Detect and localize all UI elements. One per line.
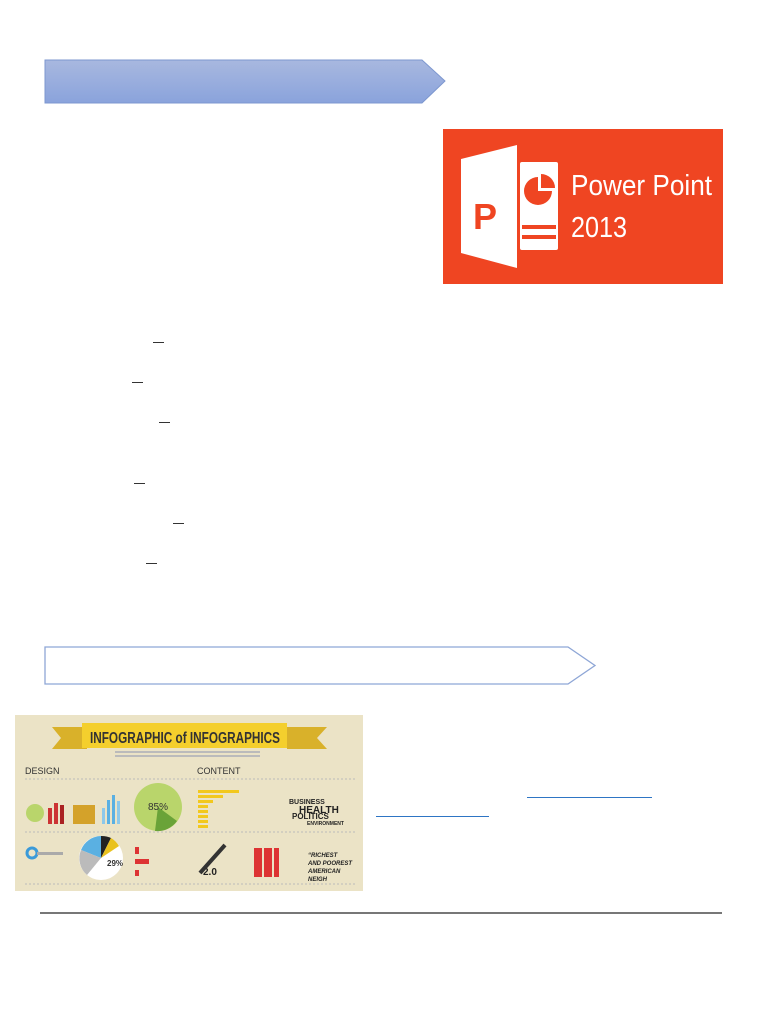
infographic image: ENVIRONMENT (307, 821, 344, 827)
bottom rule (40, 912, 722, 914)
infographic image: POLITICS (292, 812, 330, 821)
powerpoint logo (443, 129, 723, 284)
powerpoint logo: P (473, 196, 497, 237)
header arrow 1 (44, 60, 446, 104)
infographic image: NEIGH (308, 877, 328, 883)
infographic image: 29% (107, 859, 123, 868)
infographic image: CONTENT (197, 766, 241, 776)
infographic image: 85% (148, 802, 168, 813)
list dashes (132, 342, 184, 564)
infographic image: DESIGN (25, 766, 60, 776)
link underline 1 (527, 797, 652, 798)
banner: INFOGRAPHIC of INFOGRAPHICS (90, 730, 280, 747)
infographic image: “RICHEST (308, 853, 339, 859)
powerpoint logo: Power Point (571, 170, 712, 202)
small charts (26, 804, 44, 822)
link underline 2 (376, 816, 489, 817)
infographic image: AMERICAN (307, 869, 341, 875)
banner (52, 723, 327, 749)
infographic image: AND POOREST (307, 861, 353, 867)
header arrow 2 (44, 646, 596, 685)
powerpoint logo: 2013 (571, 212, 627, 244)
infographic image: HEALTH (299, 805, 339, 816)
infographic image: BUSINESS (289, 799, 325, 806)
infographic image (15, 715, 363, 891)
infographic image: 2.0 (203, 867, 217, 878)
